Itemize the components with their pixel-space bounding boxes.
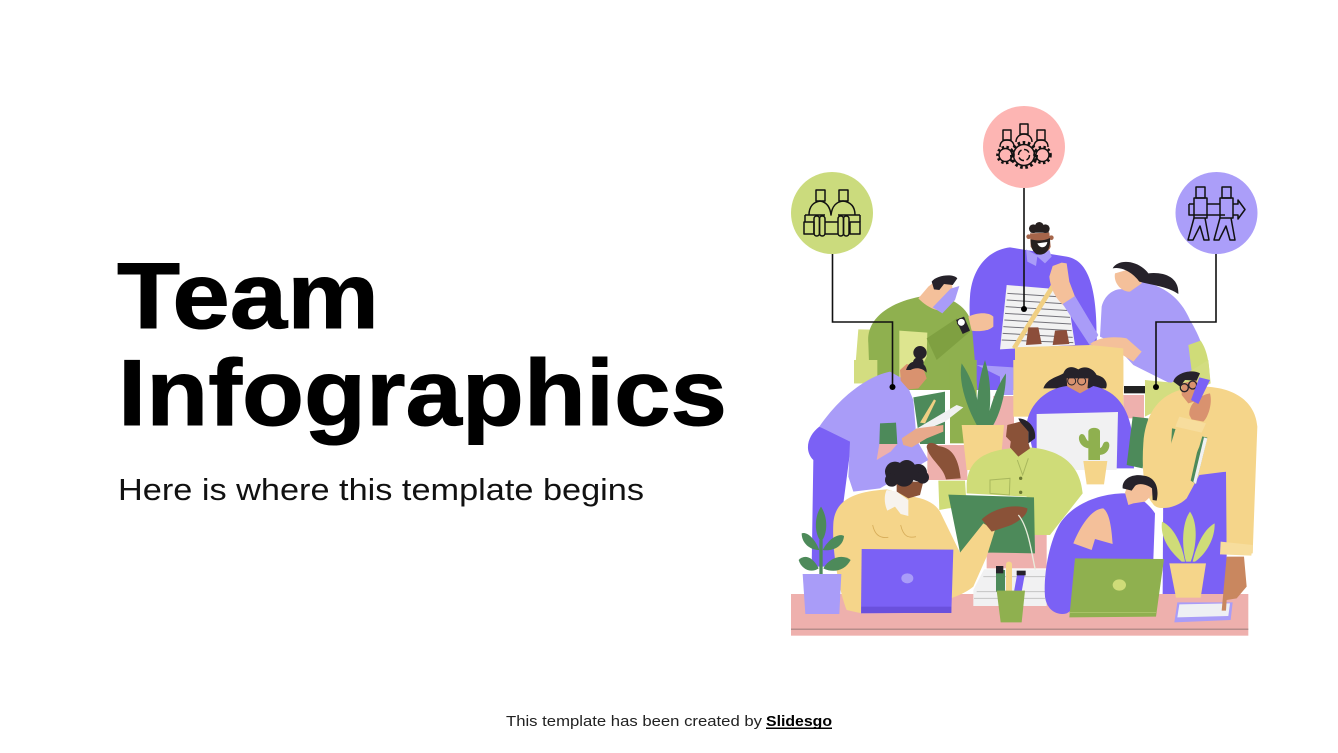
person: woman with short hair in purple (1045, 475, 1158, 614)
connector: green circle to woman with bun (832, 254, 896, 390)
person: man in green shirt with phone (868, 275, 993, 390)
callout: pink circle with team gears icon (983, 106, 1065, 188)
back layer: standing colleagues (854, 222, 1210, 390)
woman with glasses behind monitor (1027, 367, 1148, 484)
callout: purple circle with people carrying arrow icon (1176, 172, 1258, 254)
person: woman with hair bun in light purple (808, 346, 928, 567)
plant: lime plant and pot (1162, 512, 1215, 598)
illustration: team of people at a desk (854, 222, 1210, 390)
cardboard box top (1015, 345, 1123, 390)
icon: cactus in pot (1079, 428, 1109, 484)
pink desk (791, 594, 1248, 636)
icon: three people and gears (998, 124, 1050, 168)
callout: green circle with two people icon (791, 172, 873, 254)
icon: potted plant on left (799, 507, 851, 614)
green laptop (1069, 558, 1164, 617)
person: man on phone in yellow (1143, 371, 1257, 594)
title: Team (117, 243, 379, 348)
tablet and pointing hand (1174, 557, 1247, 622)
plant: snake plant (961, 360, 1006, 470)
title: Infographics (118, 340, 727, 445)
purple laptop (861, 549, 953, 613)
person: man looking up in lime shirt (927, 418, 1083, 535)
pen cup (996, 562, 1026, 622)
middle and front layer (791, 346, 1257, 636)
footer credit: This template has been created by (506, 713, 763, 730)
stack of paper (973, 569, 1047, 606)
person: woman with curly hair in yellow (833, 460, 1035, 613)
background colour blocks (854, 360, 1211, 568)
subtitle: Here is where this template begins (118, 472, 644, 507)
person: bearded man in purple (970, 222, 1098, 390)
man's lower green shirt with folder (902, 392, 963, 447)
green clipboard (948, 495, 1035, 553)
icon: two people with luggage (804, 190, 860, 236)
footer credit: Slidesgo (766, 713, 832, 730)
connector: purple circle to man on phone (1153, 254, 1216, 390)
person: woman with long hair (1049, 262, 1210, 383)
icon: two people carrying an arrow (1188, 187, 1245, 240)
title (117, 243, 727, 445)
connector: pink circle to bearded man (1021, 188, 1027, 312)
lime folder behind green shirt man (854, 329, 927, 383)
